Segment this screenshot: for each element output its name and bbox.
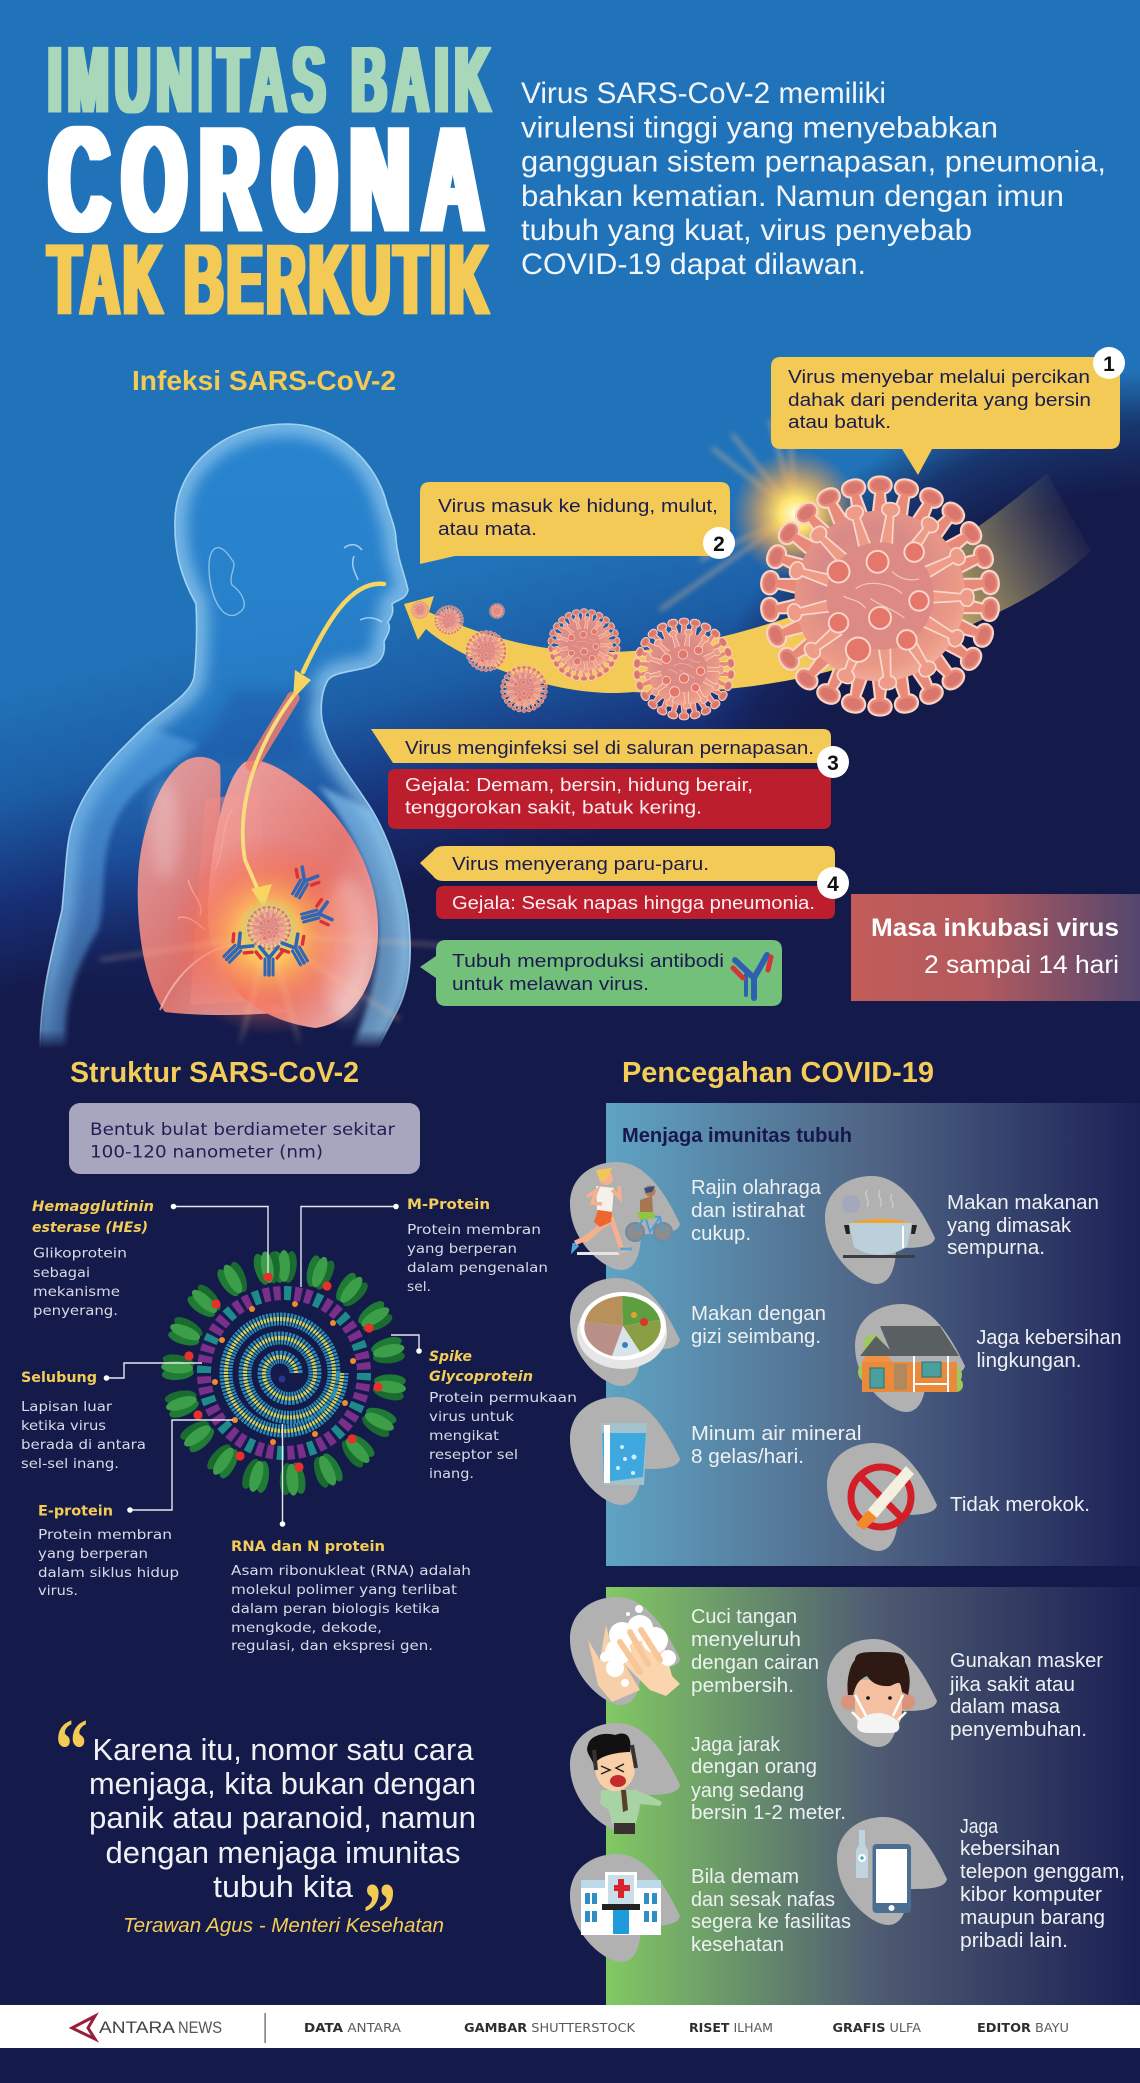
incubation box: 2 sampai 14 hari bbox=[924, 951, 1119, 979]
tip: water: 8 gelas/hari. bbox=[691, 1446, 804, 1468]
tip: cooked food bbox=[825, 1176, 1099, 1284]
small virus 4 bbox=[489, 603, 505, 619]
callout 3 bbox=[371, 729, 831, 829]
icon: pot bbox=[842, 1190, 917, 1258]
label: hemagglutinin: penyerang. bbox=[33, 1303, 118, 1319]
small virus 2 bbox=[465, 630, 507, 672]
logo: antara news bbox=[72, 2016, 222, 2039]
sun flare bbox=[660, 420, 860, 610]
quote: panik atau paranoid, namun bbox=[89, 1801, 476, 1835]
label: e-protein: E-protein bbox=[38, 1504, 113, 1520]
incubation box bbox=[851, 894, 1140, 1001]
title: IMUNITAS BAIK bbox=[48, 27, 490, 132]
callout 2 bbox=[420, 482, 730, 564]
label: m-protein bbox=[407, 1197, 548, 1295]
quote: menjaga, kita bukan dengan bbox=[89, 1767, 476, 1801]
spike glycoproteins bbox=[160, 1249, 408, 1497]
label: spike: Glycoprotein bbox=[429, 1369, 533, 1385]
tip: distance: Jaga jarak bbox=[691, 1734, 781, 1756]
credit: editor: EDITOR BAYU bbox=[977, 2020, 1069, 2035]
number 3: 3 bbox=[827, 752, 839, 775]
tip: cooked food: yang dimasak bbox=[947, 1215, 1072, 1237]
icon: water glass bbox=[601, 1423, 647, 1485]
tip: wash hands: menyeluruh bbox=[691, 1629, 801, 1651]
label: spike: inang. bbox=[429, 1466, 474, 1482]
label: selubung: Lapisan luar bbox=[21, 1399, 112, 1415]
label: spike: Spike bbox=[429, 1349, 472, 1365]
tip: water: Minum air mineral bbox=[691, 1423, 862, 1445]
tip: distance: bersin 1-2 meter. bbox=[691, 1802, 846, 1824]
virus structure diagram bbox=[160, 1249, 408, 1497]
incubation box: Masa inkubasi virus bbox=[871, 914, 1119, 942]
label: rna: mengkode, dekode, bbox=[231, 1620, 382, 1636]
intro text bbox=[521, 77, 1106, 281]
intro text: gangguan sistem pernapasan, pneumonia, bbox=[521, 146, 1106, 178]
callout 4: Gejala: Sesak napas hingga pneumonia. bbox=[452, 893, 815, 913]
heading: infeksi: Infeksi SARS-CoV-2 bbox=[132, 365, 396, 396]
quote: ” bbox=[363, 1866, 396, 1963]
callout 3: tenggorokan sakit, batuk kering. bbox=[405, 798, 702, 818]
small virus 3 bbox=[434, 605, 464, 635]
number 3 bbox=[817, 746, 849, 778]
tip: clean phone bbox=[837, 1816, 1125, 1952]
membrane ring bbox=[204, 1293, 364, 1453]
label: m-protein: sel. bbox=[407, 1279, 431, 1295]
icon: sneezing person bbox=[587, 1734, 662, 1834]
label: spike: Protein permukaan bbox=[429, 1390, 577, 1406]
tip: exercise: dan istirahat bbox=[691, 1200, 805, 1222]
icon: no smoking bbox=[851, 1466, 914, 1530]
icon: hands bbox=[588, 1605, 680, 1702]
title: CORONA bbox=[50, 95, 482, 263]
callout 1: Virus menyebar melalui percikan bbox=[788, 367, 1090, 387]
medium virus bbox=[633, 618, 735, 720]
label: rna: RNA dan N protein bbox=[231, 1539, 385, 1555]
label: e-protein: dalam siklus hidup bbox=[38, 1565, 179, 1581]
tip: clean phone: pribadi lain. bbox=[960, 1930, 1068, 1952]
heading: pencegahan: Pencegahan COVID-19 bbox=[622, 1057, 934, 1089]
callout 2: Virus masuk ke hidung, mulut, bbox=[438, 496, 718, 516]
info box: size: Bentuk bulat berdiameter sekitar bbox=[90, 1120, 395, 1139]
label: spike: reseptor sel bbox=[429, 1447, 518, 1463]
medium virus 2 bbox=[548, 609, 620, 681]
tip: wash hands bbox=[570, 1597, 819, 1705]
tip: hospital: Bila demam bbox=[691, 1866, 799, 1888]
label: spike bbox=[429, 1349, 577, 1482]
quote bbox=[55, 1702, 476, 1963]
title bbox=[48, 27, 490, 336]
title: TAK BERKUTIK bbox=[48, 224, 488, 336]
credit: riset: RISET ILHAM bbox=[689, 2020, 773, 2035]
tip: wash hands: pembersih. bbox=[691, 1675, 794, 1697]
tip: no smoking bbox=[827, 1443, 1090, 1551]
number 1: 1 bbox=[1103, 353, 1115, 376]
quote: dengan menjaga imunitas bbox=[106, 1836, 461, 1870]
large virus bbox=[760, 476, 1000, 716]
callout 4 bbox=[420, 846, 835, 919]
intro text: tubuh yang kuat, virus penyebab bbox=[521, 214, 972, 247]
label: e-protein bbox=[38, 1504, 179, 1599]
intro text: Virus SARS-CoV-2 memiliki bbox=[521, 77, 886, 110]
icon: cyclist bbox=[626, 1186, 672, 1241]
tip: distance: yang sedang bbox=[691, 1780, 804, 1802]
label: selubung: Selubung bbox=[21, 1370, 97, 1386]
label: m-protein: yang berperan bbox=[407, 1241, 517, 1257]
label: selubung: ketika virus bbox=[21, 1418, 106, 1434]
label: selubung bbox=[21, 1370, 146, 1472]
tip: distance bbox=[570, 1723, 846, 1834]
label: hemagglutinin bbox=[32, 1199, 154, 1319]
credit: grafis: GRAFIS ULFA bbox=[832, 2020, 921, 2035]
tip: clean phone: telepon genggam, bbox=[960, 1861, 1125, 1883]
intro text: COVID-19 dapat dilawan. bbox=[521, 248, 866, 281]
lungs bbox=[25, 757, 440, 1050]
tip: mask bbox=[827, 1639, 1103, 1747]
callout 4: Virus menyerang paru-paru. bbox=[452, 854, 709, 874]
label: hemagglutinin: Hemagglutinin bbox=[32, 1199, 154, 1215]
label: rna: regulasi, dan ekspresi gen. bbox=[231, 1638, 433, 1654]
callout: antibodies bbox=[420, 940, 782, 1006]
tip: mask: dalam masa bbox=[950, 1696, 1061, 1718]
tip: mask: jika sakit atau bbox=[949, 1674, 1075, 1696]
panel: menjaga imunitas bbox=[606, 1103, 1140, 1566]
tip: clean environment: Jaga kebersihan bbox=[976, 1327, 1122, 1349]
label: selubung: sel-sel inang. bbox=[21, 1456, 119, 1472]
label: e-protein: yang berperan bbox=[38, 1546, 148, 1562]
number 4 bbox=[817, 867, 849, 899]
panel heading: Menjaga imunitas tubuh bbox=[622, 1125, 852, 1147]
label: e-protein: Protein membran bbox=[38, 1527, 172, 1543]
footer bar bbox=[0, 2005, 1140, 2048]
RNA spiral bbox=[226, 1319, 342, 1431]
icon: house bbox=[858, 1326, 963, 1392]
tip: mask: penyembuhan. bbox=[950, 1719, 1087, 1741]
intro text: virulensi tinggi yang menyebabkan bbox=[521, 112, 998, 144]
leader lines bbox=[104, 1204, 422, 1527]
arrow: virus to lungs bbox=[243, 584, 384, 908]
trachea bbox=[252, 698, 293, 765]
credit: data: DATA ANTARA bbox=[304, 2020, 401, 2035]
tip: cooked food: sempurna. bbox=[947, 1237, 1045, 1259]
tip: hospital: dan sesak nafas bbox=[691, 1889, 835, 1911]
callout: antibodies: Tubuh memproduksi antibodi bbox=[452, 951, 724, 971]
label: hemagglutinin: mekanisme bbox=[33, 1284, 120, 1300]
tip: mask: Gunakan masker bbox=[950, 1650, 1103, 1672]
callout 1 bbox=[771, 357, 1120, 475]
tip: balanced food: Makan dengan bbox=[691, 1303, 826, 1325]
human body bbox=[40, 424, 410, 1048]
yellow swoosh arrow bbox=[404, 473, 1091, 693]
tip: distance: dengan orang bbox=[691, 1756, 817, 1778]
tip: clean phone: kebersihan bbox=[960, 1838, 1060, 1860]
intro text: bahkan kematian. Namun dengan imun bbox=[521, 180, 1064, 213]
tip: clean phone: Jaga bbox=[960, 1816, 999, 1838]
callout 1: dahak dari penderita yang bersin bbox=[788, 390, 1091, 410]
label: rna bbox=[231, 1539, 471, 1654]
icon: antibody bbox=[733, 955, 771, 998]
body fade bbox=[25, 1030, 425, 1050]
tip: clean phone: kibor komputer bbox=[960, 1884, 1102, 1906]
quote: Karena itu, nomor satu cara bbox=[92, 1733, 474, 1767]
label: e-protein: virus. bbox=[38, 1583, 78, 1599]
quote: “ bbox=[55, 1702, 88, 1799]
label: m-protein: dalam pengenalan bbox=[407, 1260, 548, 1276]
background gradient bbox=[0, 0, 1140, 1100]
tip: exercise bbox=[570, 1162, 822, 1270]
info box: size: 100-120 nanometer (nm) bbox=[90, 1142, 323, 1162]
callout 3: Virus menginfeksi sel di saluran pernapasan. bbox=[405, 738, 814, 758]
quote: Terawan Agus - Menteri Kesehatan bbox=[123, 1915, 444, 1937]
label: hemagglutinin: esterase (HEs) bbox=[32, 1220, 148, 1236]
icon: hospital bbox=[581, 1872, 661, 1935]
credit: gambar: GAMBAR SHUTTERSTOCK bbox=[464, 2020, 636, 2035]
antibodies around virus bbox=[217, 865, 333, 975]
icon: phone and spray bbox=[856, 1830, 911, 1913]
small virus 1 bbox=[500, 665, 548, 713]
tip: balanced food bbox=[570, 1278, 826, 1386]
tip: no smoking: Tidak merokok. bbox=[950, 1494, 1090, 1516]
panel: green bbox=[606, 1587, 1140, 2005]
number 2 bbox=[703, 527, 735, 559]
tip: clean environment: lingkungan. bbox=[976, 1350, 1082, 1372]
HE proteins bbox=[184, 1272, 383, 1472]
label: hemagglutinin: Glikoprotein bbox=[33, 1246, 127, 1262]
heading: struktur: Struktur SARS-CoV-2 bbox=[70, 1057, 359, 1089]
label: hemagglutinin: sebagai bbox=[33, 1265, 90, 1281]
label: selubung: berada di antara bbox=[21, 1437, 146, 1453]
logo: antara news: NEWS bbox=[178, 2018, 222, 2037]
callout 2: atau mata. bbox=[438, 519, 537, 539]
callout 1: atau batuk. bbox=[788, 412, 891, 432]
tip: hospital: kesehatan bbox=[691, 1934, 784, 1956]
label: rna: molekul polimer yang terlibat bbox=[231, 1582, 457, 1598]
number 1 bbox=[1093, 347, 1125, 379]
tip: exercise: Rajin olahraga bbox=[691, 1177, 822, 1199]
tip: wash hands: dengan cairan bbox=[691, 1652, 819, 1674]
tip: hospital: segera ke fasilitas bbox=[691, 1911, 851, 1933]
icon: plate bbox=[577, 1292, 667, 1369]
callout 3: Gejala: Demam, bersin, hidung berair, bbox=[405, 775, 753, 795]
callout: antibodies: untuk melawan virus. bbox=[452, 974, 649, 994]
tip: clean phone: maupun barang bbox=[960, 1907, 1105, 1929]
number 2: 2 bbox=[713, 533, 725, 556]
logo: antara news: ANTARA bbox=[99, 2018, 176, 2037]
icon: face with mask bbox=[841, 1652, 915, 1733]
label: m-protein: Protein membran bbox=[407, 1222, 541, 1238]
tip: wash hands: Cuci tangan bbox=[691, 1606, 797, 1628]
tip: hospital bbox=[570, 1854, 851, 1962]
background dark corner bbox=[650, 360, 1140, 1100]
lung virus bbox=[243, 903, 295, 955]
tip: clean environment bbox=[855, 1304, 1122, 1412]
label: spike: virus untuk bbox=[429, 1409, 514, 1425]
quote: tubuh kita bbox=[213, 1870, 353, 1904]
icon: runner bbox=[573, 1168, 632, 1255]
tip: balanced food: gizi seimbang. bbox=[691, 1326, 821, 1348]
E proteins bbox=[212, 1301, 356, 1445]
info box: size bbox=[69, 1103, 420, 1174]
label: spike: mengikat bbox=[429, 1428, 499, 1444]
tip: exercise: cukup. bbox=[691, 1223, 751, 1245]
small virus 5 bbox=[411, 601, 429, 619]
number 4: 4 bbox=[827, 873, 839, 896]
label: rna: Asam ribonukleat (RNA) adalah bbox=[231, 1563, 471, 1579]
tip: cooked food: Makan makanan bbox=[947, 1192, 1099, 1214]
tip: water bbox=[570, 1397, 862, 1505]
label: m-protein: M-Protein bbox=[407, 1197, 490, 1213]
label: rna: dalam peran biologis ketika bbox=[231, 1601, 440, 1617]
